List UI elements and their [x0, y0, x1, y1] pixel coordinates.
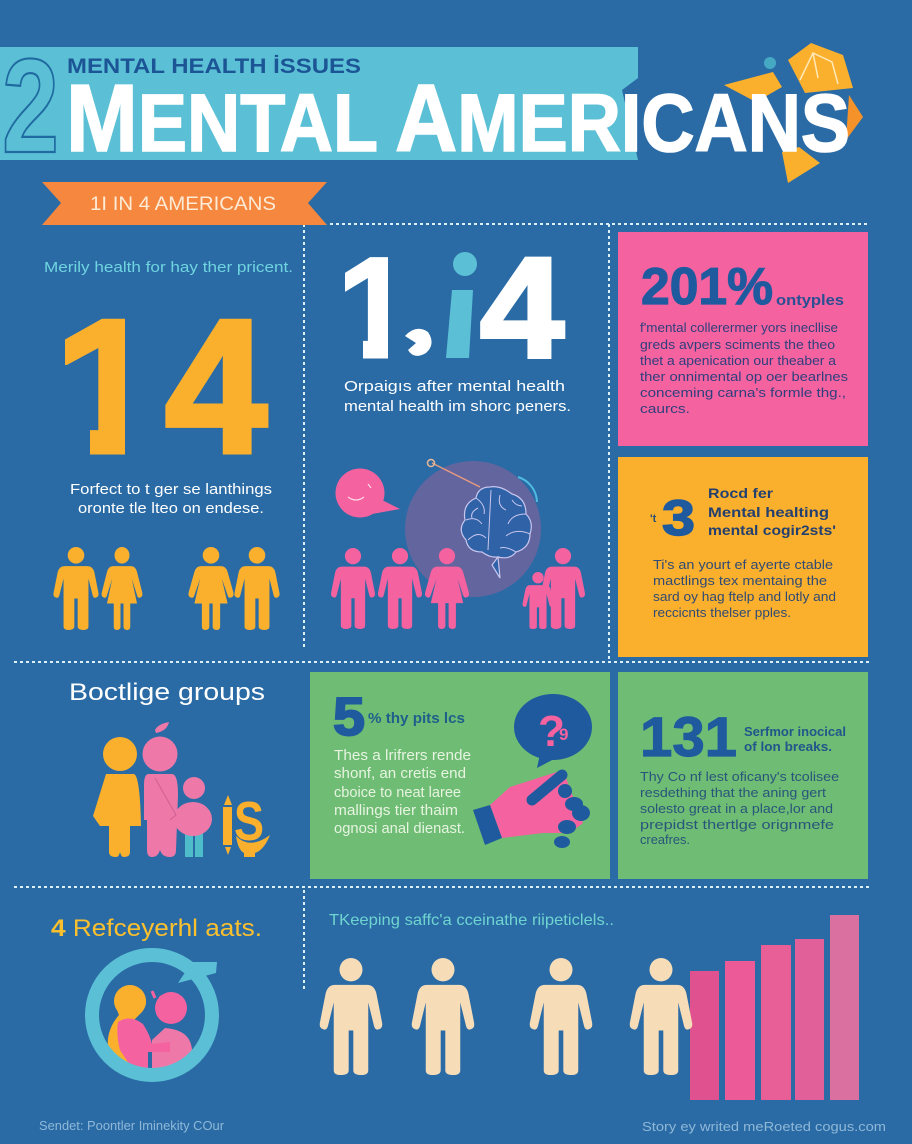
beige people icons — [320, 958, 692, 1075]
paragraph: f'mental collerermer yors inecllise — [640, 321, 838, 335]
orange ribbon — [42, 182, 327, 225]
figure label: of lon breaks. — [744, 740, 832, 754]
caption: Merily health for hay ther pricent. — [44, 259, 293, 276]
pointing hand — [473, 770, 590, 848]
heading: TKeeping saffc'a cceinathe riipeticlels.. — [329, 912, 614, 929]
number 5: 5 — [333, 687, 365, 747]
footer right: Story ey writed meRoeted cogus.com — [642, 1119, 886, 1134]
paragraph: Ti's an yourt ef ayerte ctable — [653, 558, 833, 572]
panel: green statistic — [618, 672, 868, 879]
question speech bubble: 9 — [559, 725, 568, 744]
pencil IS glyph: S — [234, 790, 264, 852]
orange ribbon: 1I IN 4 AMERICANS — [90, 194, 276, 215]
paragraph — [640, 321, 848, 416]
heading: 4 Refceyerhl aats. — [51, 915, 262, 942]
paragraph: thet a apenication our theaber a — [640, 354, 836, 368]
paragraph: creafres. — [640, 833, 690, 847]
dotted dividers — [14, 224, 870, 990]
pink speech bubble — [336, 468, 400, 518]
panel heading: mental cogir2sts' — [708, 522, 836, 538]
description: Forfect to t ger se lanthings — [70, 481, 272, 498]
figure label — [744, 725, 846, 754]
section: groups — [69, 679, 270, 857]
main title: MENTAL — [66, 65, 378, 172]
pencil IS glyph — [223, 790, 270, 857]
family icon — [93, 722, 212, 857]
paragraph: caurcs. — [640, 402, 690, 416]
panel heading — [708, 485, 836, 538]
panel: yellow statistic — [618, 457, 868, 657]
paragraph: conceming carna's formle thg., — [640, 386, 846, 400]
paragraph: sard oy hag ftelp and lotly and — [653, 590, 836, 604]
decorative shapes — [724, 43, 863, 183]
paragraph: ther onnimental op oer bearlnes — [640, 370, 848, 384]
description — [70, 481, 272, 517]
big number 14 — [65, 318, 268, 454]
paragraph: Thy Co nf lest oficany's tcolisee — [640, 770, 839, 784]
description: mental health im shorc peners. — [344, 398, 571, 415]
subtitle: MENTAL HEALTH İSSUES — [67, 55, 361, 78]
footer left: Sendet: Poontler Iminekity COur — [39, 1119, 224, 1133]
main title second word: AMERICANS — [395, 65, 850, 172]
center column statistic — [331, 229, 585, 629]
paragraph: cboice to neat laree — [334, 784, 461, 801]
section: bottom chart — [320, 912, 859, 1100]
panel: green question — [310, 672, 610, 879]
panel heading: Mental healting — [708, 504, 829, 520]
big 1 in 4: 4 — [480, 229, 564, 388]
heading: Boctlige groups — [69, 679, 265, 706]
paragraph: Thes a lrifrers rende — [334, 747, 471, 764]
paragraph: mactlings tex mentaing the — [653, 574, 827, 588]
description — [344, 378, 571, 415]
description: Orpaigıs after mental health — [344, 378, 565, 395]
paragraph — [334, 747, 471, 837]
big number 14: 4 — [165, 281, 267, 493]
paragraph: prepidst thertlge orignmefe — [640, 818, 834, 832]
yellow people icons — [53, 547, 280, 630]
small marks beside number: 't — [650, 513, 657, 525]
section: bottom left ring — [51, 915, 262, 1075]
paragraph: mallings tier thaim — [334, 802, 458, 819]
paragraph — [653, 558, 836, 620]
brain circle illustration — [405, 460, 541, 597]
panel heading: Rocd fer — [708, 485, 774, 501]
paragraph: ognosi anal dienast. — [334, 820, 465, 837]
paragraph: resdething that the aning gert — [640, 786, 827, 800]
number 3: 3 — [662, 490, 695, 546]
figure label: ontyples — [776, 292, 844, 309]
outlined number 2: 2 — [2, 32, 59, 181]
big 1 in 4: 1 — [335, 229, 417, 388]
big number 14: 1 — [50, 281, 172, 493]
bar chart — [690, 915, 859, 1100]
number 131: 131 — [640, 705, 737, 768]
question speech bubble: ? — [538, 707, 565, 756]
description: oronte tle lteo on endese. — [78, 500, 264, 517]
paragraph: solesto great in a place,lor and — [640, 802, 833, 816]
paragraph: shonf, an cretis end — [334, 765, 466, 782]
title banner — [0, 32, 863, 183]
201 percent figure: 201% — [641, 258, 773, 316]
paragraph: reccicnts thelser pples. — [653, 606, 791, 620]
paragraph: greds avpers sciments the theo — [640, 338, 835, 352]
pink people icons — [331, 548, 585, 629]
couple in ring icon — [92, 955, 217, 1075]
big 1 in 4 — [345, 252, 566, 359]
paragraph — [640, 770, 839, 847]
figure label: Serfmor inocical — [744, 725, 846, 739]
question speech bubble — [514, 694, 592, 768]
panel: pink statistic — [618, 232, 868, 446]
figure label: % thy pits lcs — [368, 710, 465, 727]
left column statistic — [44, 259, 293, 630]
